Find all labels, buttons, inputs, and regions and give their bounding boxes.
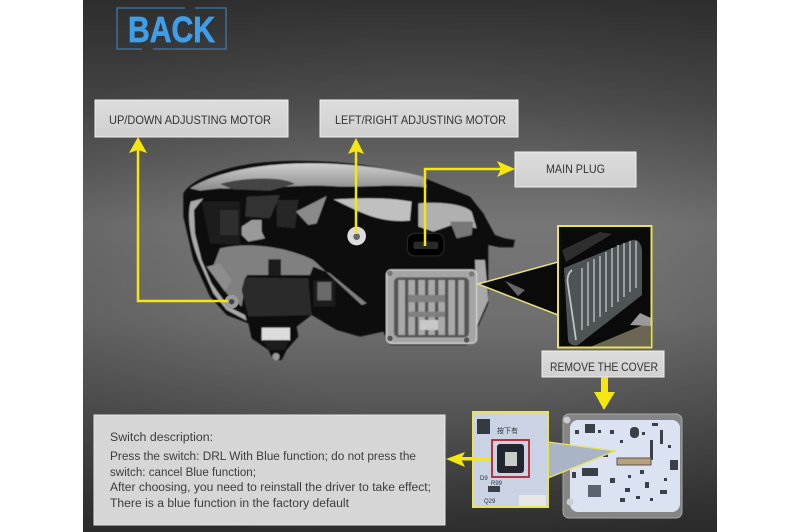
callout: up/down adjusting motor: UP/DOWN ADJUSTING MOTOR [109, 113, 271, 127]
driver module [387, 270, 477, 343]
text panel: switch description: After choosing, you need to reinstall the driver to take effect; [110, 482, 431, 494]
arrow: main plug [425, 161, 515, 246]
right connector [450, 222, 473, 238]
grey housing [212, 245, 367, 307]
lamp fittings [225, 227, 474, 343]
callout: up/down adjusting motor [95, 100, 288, 137]
plug socket [407, 233, 444, 256]
lens top strip [190, 163, 427, 191]
lower stem [262, 328, 290, 340]
inset: switch closeup: Q29 [484, 499, 496, 505]
callout: left/right adjusting motor: LEFT/RIGHT ADJUSTING MOTOR [335, 113, 506, 127]
motor block [242, 277, 312, 317]
adjusting screw left [225, 295, 239, 309]
lamp silhouette [183, 161, 515, 360]
text panel: switch description: switch: cancel Blue function; [110, 467, 256, 479]
callout: main plug [515, 152, 636, 187]
arrow: up/down motor [129, 137, 228, 301]
bracket [242, 220, 265, 242]
text panel: switch description: Press the switch: DRL With Blue function; do not press the [110, 451, 416, 463]
text panel: switch description: There is a blue function in the factory default [110, 498, 350, 510]
inset: switch closeup: 按下有 [497, 426, 518, 435]
headlamp illustration [183, 161, 515, 360]
callout: left/right adjusting motor [320, 100, 518, 137]
side part [475, 260, 488, 327]
adjusting screw centre [347, 227, 366, 245]
callout: main plug: MAIN PLUG [546, 164, 605, 176]
inset: switch closeup: R99 [491, 481, 503, 487]
inset: switch closeup [473, 412, 615, 507]
left interior [202, 202, 240, 245]
background panel [83, 0, 717, 532]
arrow: left/right motor [348, 138, 364, 234]
circuit board [563, 414, 682, 518]
text panel: switch description [94, 415, 445, 525]
arrow: down to board [594, 377, 615, 410]
callout: remove the cover: REMOVE THE COVER [550, 360, 658, 374]
inset: driver cover closeup [478, 226, 652, 348]
lens side edge [189, 198, 247, 321]
arrow: board to description [446, 452, 491, 467]
inset: switch closeup: D9 [480, 476, 488, 482]
title: BACK: BACK [128, 9, 215, 50]
text panel: switch description: Switch description: [110, 432, 213, 444]
callout: remove the cover [542, 351, 664, 377]
